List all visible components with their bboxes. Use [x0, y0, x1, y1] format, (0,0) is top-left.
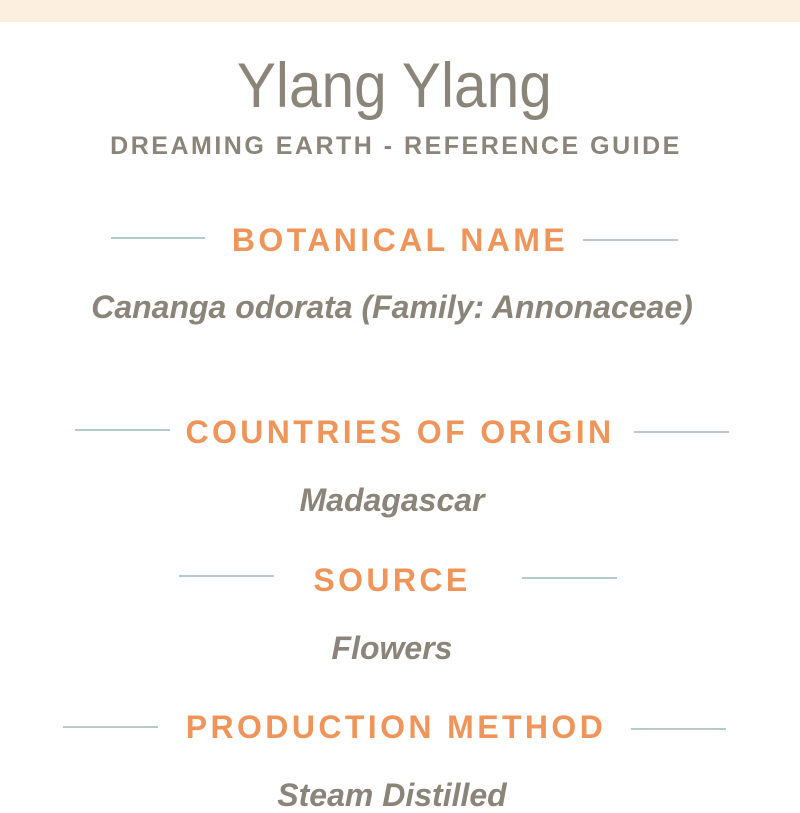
- subtitle: DREAMING EARTH - REFERENCE GUIDE: [110, 132, 682, 160]
- text: countries: Madagascar: [300, 482, 484, 518]
- top bar: [0, 0, 800, 22]
- text: source: Flowers: [332, 630, 452, 666]
- heading: botanical name: BOTANICAL NAME: [232, 222, 568, 258]
- heading: source: SOURCE: [313, 562, 471, 598]
- title: Ylang Ylang: [237, 51, 551, 121]
- heading: production: PRODUCTION METHOD: [186, 709, 606, 745]
- text: production: Steam Distilled: [277, 777, 507, 813]
- heading: countries: COUNTRIES OF ORIGIN: [185, 414, 615, 450]
- text: botanical name: Cananga odorata (Family: Annonaceae): [91, 289, 693, 325]
